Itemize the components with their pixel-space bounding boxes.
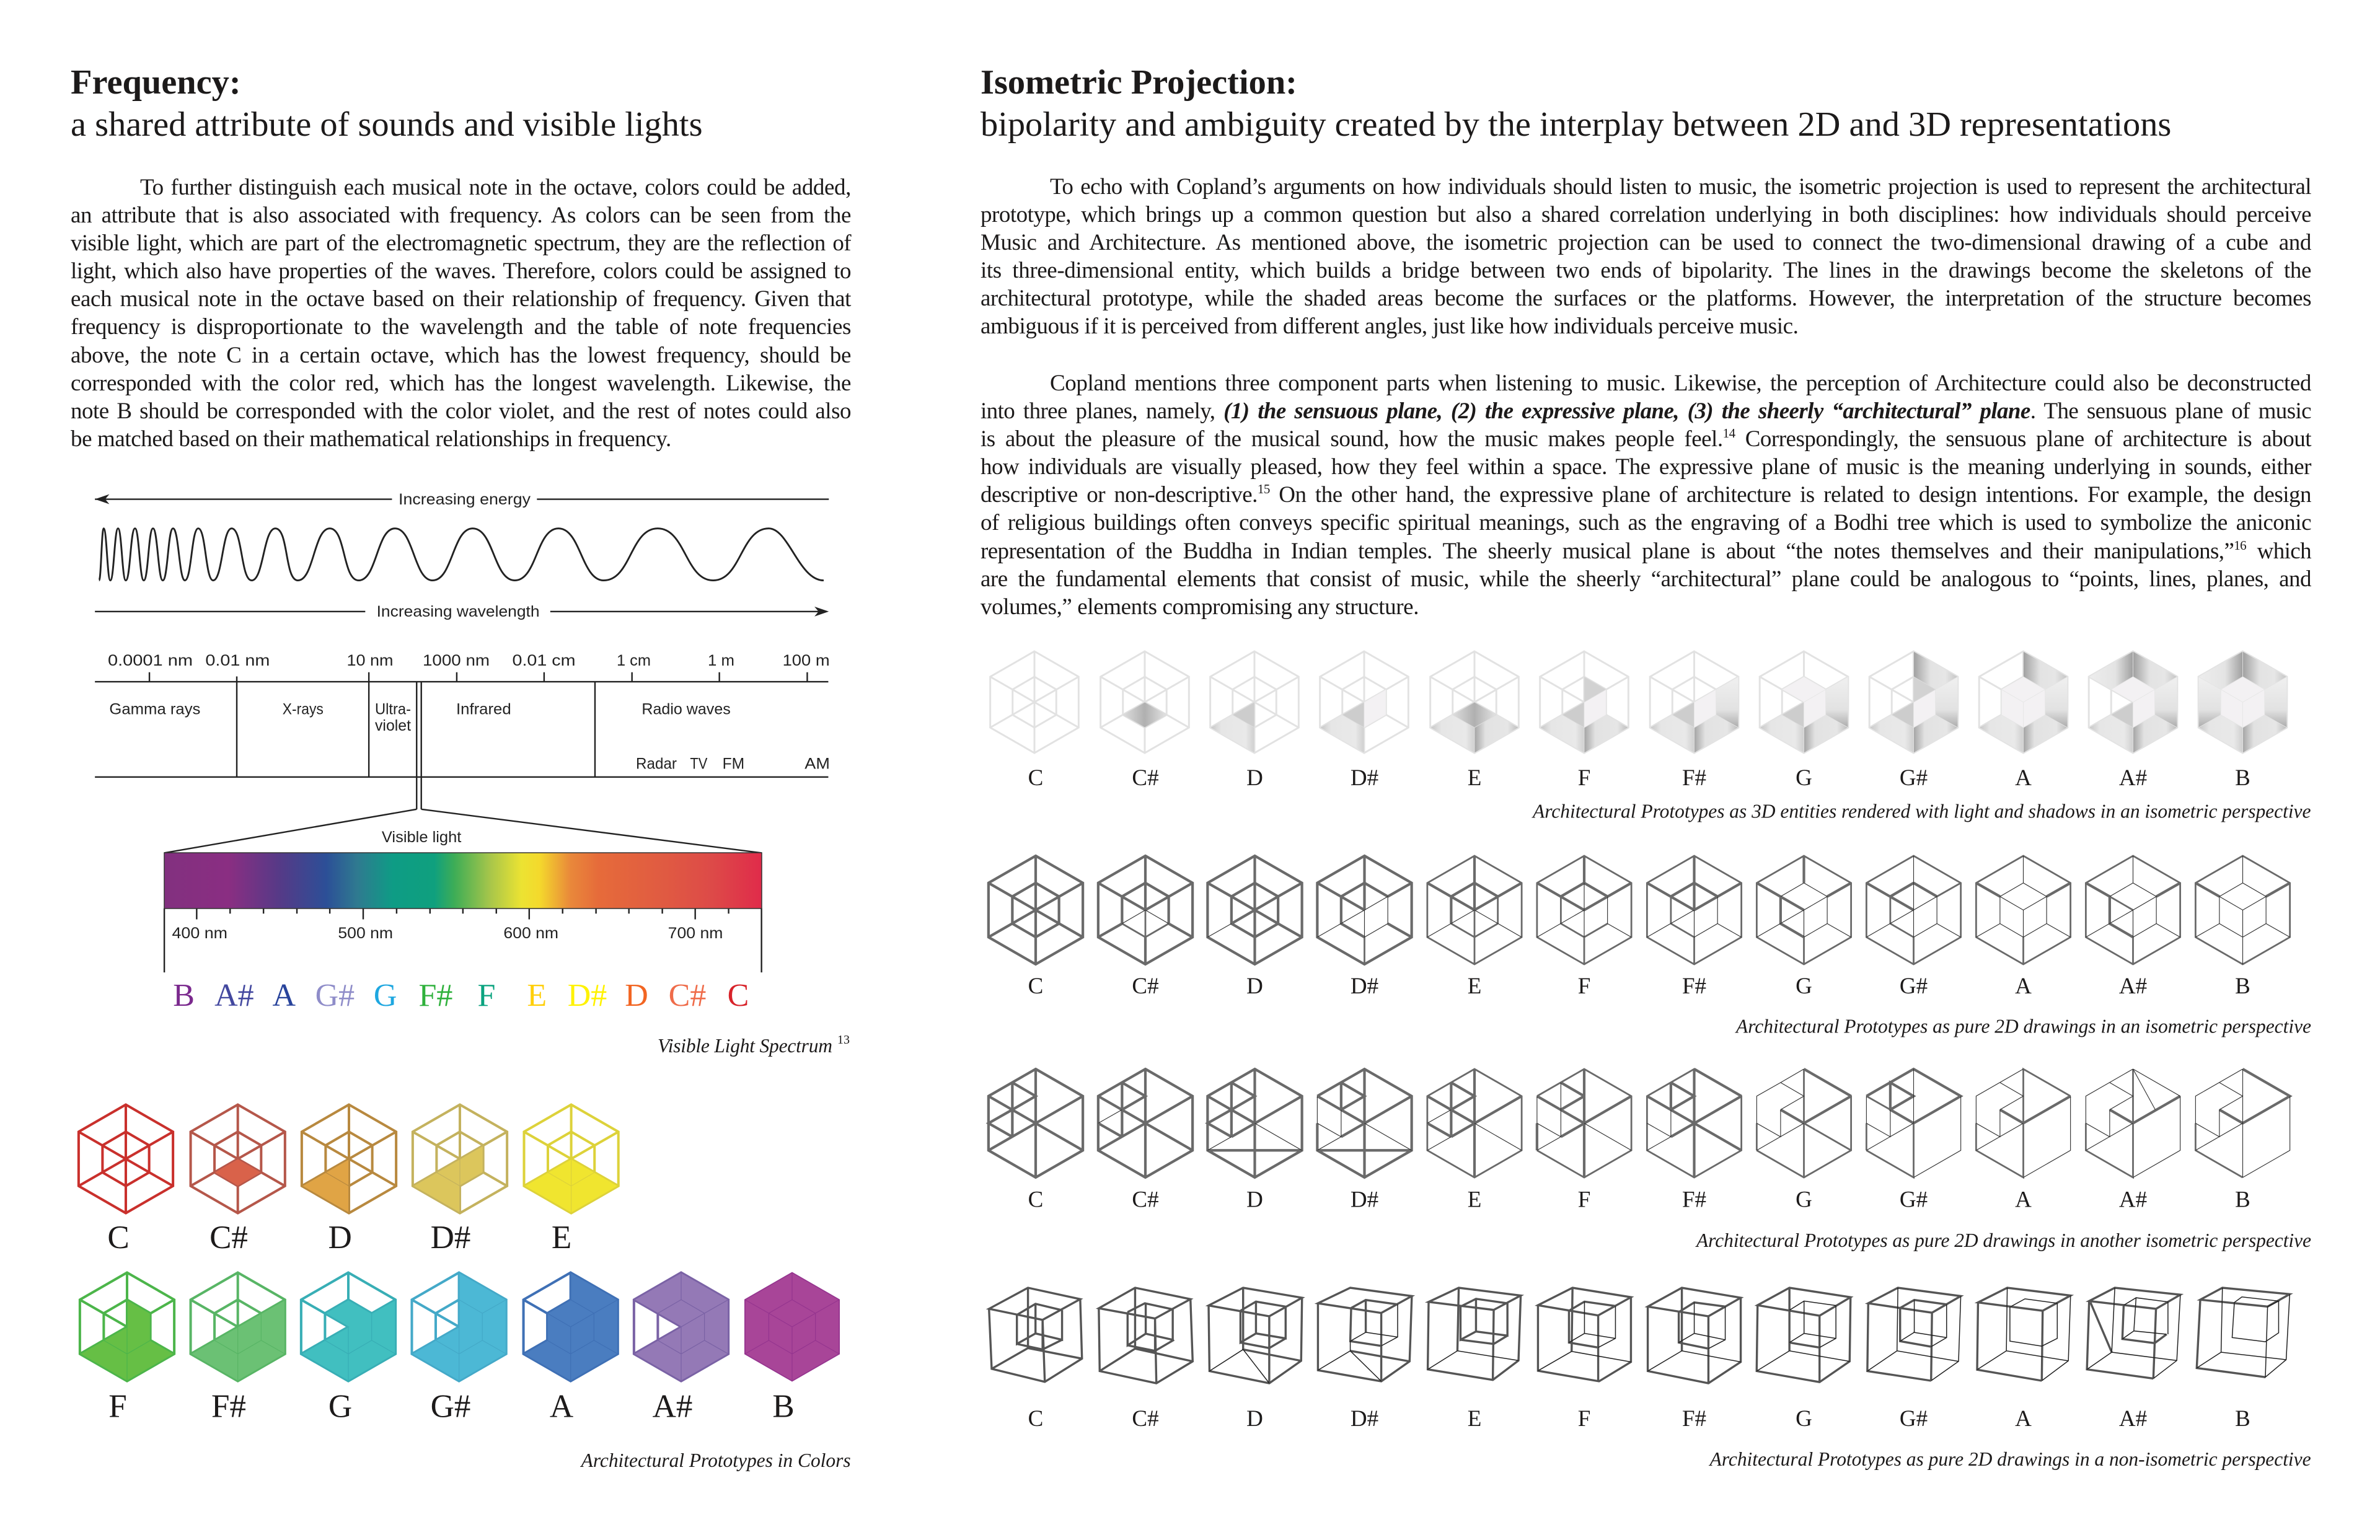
icon: G 3D (1760, 651, 1848, 791)
icon: D 2D (1207, 856, 1302, 999)
icon: G# alt: G# (1900, 1187, 1928, 1213)
text block: isometric paragraph one (981, 174, 2311, 339)
band labels: FM (723, 755, 744, 772)
text block: isometric paragraph two: representation of the Buddha in Indian temples. The sheerly musical plane is about “the notes themselves and their manipulations,”16 which (981, 538, 2311, 564)
icon: G alt (1756, 1069, 1851, 1213)
band labels: TV (690, 755, 708, 772)
icon: E alt (1427, 1069, 1522, 1213)
musical note letters: C (728, 978, 749, 1013)
band labels (109, 701, 830, 772)
scale labels: 1 m (708, 652, 734, 669)
icon: F perspective (1538, 1288, 1631, 1432)
icon: A# (634, 1273, 728, 1424)
icon: A 3D (1979, 651, 2068, 791)
band labels: Infrared (456, 701, 511, 718)
icon: A# 3D: A# (2119, 765, 2147, 791)
text block: isometric paragraph one: Music and Architecture. As mentioned above, the isometric projection can be used to connect the two-dimensional drawing of a cube and (981, 230, 2311, 255)
icon: B perspective (2197, 1288, 2290, 1432)
icon: D# 3D: D# (1351, 765, 1378, 791)
scale labels: 0.01 nm (205, 652, 270, 669)
text block: isometric paragraph one: prototype, which brings up a common question but also a shared correlation underlying in both disciplines: how individuals should perceive (981, 202, 2311, 227)
icon: F perspective: F (1578, 1406, 1590, 1432)
text block: isometric paragraph two: are the fundamental elements that consist of music, while the sheerly “architectural” plane could be analogous to “points, lines, planes, and (981, 566, 2311, 592)
icon: C# perspective: C# (1132, 1406, 1159, 1432)
icon: G (301, 1273, 395, 1424)
icon: A# alt (2086, 1069, 2180, 1213)
icon: G# perspective: G# (1900, 1406, 1928, 1432)
icon: F# perspective (1648, 1288, 1741, 1432)
icon: B 2D (2195, 856, 2290, 999)
icon: F# 2D (1647, 856, 1742, 999)
musical note letters: G# (315, 978, 355, 1013)
icon: C perspective (989, 1288, 1082, 1432)
icon: G# (412, 1273, 506, 1424)
caption: prototypes in colors: Architectural Prototypes in Colors (580, 1450, 851, 1471)
icon: E (524, 1104, 619, 1256)
icon: D# 3D (1320, 651, 1408, 791)
text block: frequency paragraph: frequency is disproportionate to the wavelength and the table of note frequencies (71, 314, 851, 340)
musical note letters (173, 978, 749, 1013)
text block: isometric paragraph one: architectural prototype, while the shaded areas become the surfaces or the platforms. However, the interpretation of the structure becomes (981, 286, 2311, 311)
text block: frequency paragraph (71, 175, 852, 452)
icon: D 3D: D (1246, 765, 1263, 791)
scale labels: 0.0001 nm (108, 652, 193, 669)
text block: frequency paragraph: visible light, which are part of the electromagnetic spectrum, they are the reflection of (71, 231, 851, 256)
band labels: Ultra- (375, 701, 411, 718)
icon: A alt: A (2015, 1187, 2032, 1213)
heading: Isometric Projection: Isometric Projection: (981, 63, 1297, 102)
icon: A# perspective: A# (2119, 1406, 2147, 1432)
icon: B perspective: B (2235, 1406, 2250, 1432)
arrow: increasing energy (95, 495, 829, 504)
musical note letters: F (478, 978, 495, 1013)
icon: B 2D: B (2235, 974, 2250, 999)
icon: A alt (1976, 1069, 2071, 1213)
icon: D alt (1207, 1069, 1302, 1213)
icon: G# alt (1866, 1069, 1961, 1213)
icon: F# 2D: F# (1682, 974, 1706, 999)
icon: A (524, 1273, 618, 1424)
text block: isometric paragraph two: Copland mentions three component parts when listening to music. Likewise, the perception of Architecture could also be deconstructed (1050, 371, 2311, 396)
icon: D# alt: D# (1351, 1187, 1378, 1213)
icon: G perspective: G (1796, 1406, 1812, 1432)
icon: C# 2D: C# (1132, 974, 1159, 999)
nanometre labels: 500 nm (338, 925, 393, 942)
icon: E perspective (1428, 1288, 1521, 1432)
icon: F# perspective: F# (1682, 1406, 1706, 1432)
icon: C# alt (1098, 1069, 1192, 1213)
heading: Frequency (71, 63, 703, 144)
band labels: Radio waves (641, 701, 731, 718)
text block: isometric paragraph two: into three planes, namely, (1) the sensuous plane, (2) the expressive plane, (3) the sheerly “architectural” plane. The sensuous plane of music (981, 398, 2311, 424)
icon: G# perspective (1867, 1288, 1961, 1432)
icon: F# alt: F# (1682, 1187, 1706, 1213)
diagram: electromagnetic spectrum (95, 491, 830, 1013)
icon: A 2D (1976, 856, 2071, 999)
icon: E 3D: E (1468, 765, 1481, 791)
icon: F (80, 1273, 174, 1424)
label: increasing wavelength: Increasing wavelength (377, 603, 540, 620)
icon: F# (191, 1273, 285, 1424)
icon: A: A (550, 1388, 573, 1424)
icon: C red: C (107, 1220, 130, 1256)
heading: Isometric Projection: bipolarity and ambiguity created by the interplay between 2D and 3D representations (981, 105, 2171, 144)
icon: B alt: B (2235, 1187, 2250, 1213)
text block: frequency paragraph: To further distinguish each musical note in the octave, colors could be added, (140, 175, 851, 200)
icon: C# (191, 1104, 285, 1256)
icon: G perspective (1756, 1288, 1851, 1432)
caption: visible light spectrum: Visible Light Spectrum (658, 1035, 832, 1057)
icon: A 2D: A (2015, 974, 2032, 999)
icon: G#: G# (431, 1388, 470, 1424)
icon: C# 3D: C# (1132, 765, 1159, 791)
text block: frequency paragraph: an attribute that is also associated with frequency. As colors can be seen from the (71, 203, 851, 228)
musical note letters: D (625, 978, 648, 1013)
icon: D# alt (1317, 1069, 1412, 1213)
icon: B: B (772, 1388, 795, 1424)
row: another isometric perspective (989, 1069, 2290, 1213)
band labels: AM (804, 755, 830, 772)
icon: A# 2D (2086, 856, 2180, 999)
icon: F alt (1537, 1069, 1631, 1213)
icon: C perspective: C (1028, 1406, 1043, 1432)
icon: D perspective: D (1246, 1406, 1263, 1432)
icon: E 2D: E (1468, 974, 1481, 999)
caption: visible light spectrum: 13 (837, 1033, 850, 1047)
icon: C 3D: C (1028, 765, 1043, 791)
nanometre labels: 700 nm (668, 925, 723, 942)
icon: G: G (328, 1388, 352, 1424)
icon: B 3D (2198, 651, 2287, 791)
text block: frequency paragraph: above, the note C in a certain octave, which has the lowest frequency, should be (71, 343, 851, 368)
musical note letters: G (374, 978, 397, 1013)
icon: A perspective (1977, 1288, 2071, 1432)
icon: F# 3D: F# (1682, 765, 1706, 791)
icon: C 3D (990, 651, 1078, 791)
icon: A# 3D (2089, 651, 2177, 791)
band labels: Gamma rays (109, 701, 200, 718)
nanometre labels: 400 nm (172, 925, 227, 942)
caption: 3D entities: Architectural Prototypes as 3D entities rendered with light and shadows in an isometric perspective (1532, 801, 2311, 822)
band labels: Radar (636, 755, 677, 772)
icon: B alt (2195, 1069, 2290, 1213)
scale labels (108, 652, 830, 669)
musical note letters: C# (669, 978, 706, 1013)
icon: G 3D: G (1796, 765, 1812, 791)
icon: A# alt: A# (2119, 1187, 2147, 1213)
icon: F#: F# (211, 1388, 246, 1424)
caption: another isometric perspective: Architectural Prototypes as pure 2D drawings in another isometric perspective (1695, 1230, 2311, 1251)
icon: F# alt (1647, 1069, 1742, 1213)
text block: isometric paragraph two: how individuals are visually pleased, how they feel within a space. The expressive plane of music is the meaning underlying in sounds, either (981, 454, 2311, 480)
icon: F 3D (1540, 651, 1628, 791)
icon: F alt: F (1578, 1187, 1590, 1213)
icon: F 3D: F (1578, 765, 1590, 791)
text block: isometric paragraph one: its three-dimensional entity, which builds a bridge between two ends of bipolarity. The lines in the drawings become the skeletons of the (981, 258, 2311, 283)
icon: D: D (328, 1220, 352, 1256)
icon: C# alt: C# (1132, 1187, 1159, 1213)
icon: A# perspective (2087, 1288, 2180, 1432)
icon: A# 2D: A# (2119, 974, 2147, 999)
text block: isometric paragraph two: is about the pleasure of the musical sound, how the music makes people feel.14 Correspondingly, the sensuous plane of architecture is about (981, 426, 2311, 452)
scale labels: 1000 nm (423, 652, 490, 669)
heading: Frequency: a shared attribute of sounds and visible lights (71, 105, 703, 144)
icon: C red (79, 1104, 173, 1256)
band labels: violet (375, 717, 411, 734)
musical note letters: F# (418, 978, 452, 1013)
chart: wavelength scale lines (95, 672, 828, 972)
arrow: increasing wavelength (95, 607, 829, 617)
nanometre labels: 600 nm (503, 925, 558, 942)
nanometre labels (172, 925, 723, 942)
icon: D 3D (1210, 651, 1298, 791)
row: 3D rendered prototypes (990, 651, 2287, 791)
icon: F 2D: F (1578, 974, 1590, 999)
icon: F: F (108, 1388, 127, 1424)
scale labels: 100 m (783, 652, 830, 669)
icon: E: E (552, 1220, 571, 1256)
row: non-isometric perspective (989, 1288, 2290, 1432)
scale labels: 1 cm (617, 652, 651, 669)
icon: D alt: D (1246, 1187, 1263, 1213)
text block: isometric paragraph two: volumes,” elements compromising any structure. (981, 594, 1419, 620)
icon: C# 2D (1098, 856, 1192, 999)
icon: C alt: C (1028, 1187, 1043, 1213)
musical note letters: B (173, 978, 195, 1013)
text block: isometric paragraph one: To echo with Copland’s arguments on how individuals should listen to music, the isometric projection is used to represent the architectural (1050, 174, 2311, 200)
text block: isometric paragraph two: of religious buildings often conveys specific spiritual meanings, such as the engraving of a Bodhi tree which is used to symbolize the aniconic (981, 510, 2311, 535)
label: visible light: Visible light (382, 829, 461, 846)
icon: G# 2D (1866, 856, 1961, 999)
text block: isometric paragraph two: descriptive or non-descriptive.15 On the other hand, the expressive plane of architecture is related to design intentions. For example, the design (981, 482, 2311, 508)
icon: C# 3D (1101, 651, 1189, 791)
text block: isometric paragraph one: ambiguous if it is perceived from different angles, just like how individuals perceive music. (981, 314, 1798, 339)
icon: E alt: E (1468, 1187, 1481, 1213)
caption: pure 2D isometric: Architectural Prototypes as pure 2D drawings in an isometric perspective (1735, 1015, 2311, 1037)
text block: isometric paragraph two (981, 371, 2312, 620)
icon: C alt (989, 1069, 1083, 1213)
icon: D# (413, 1104, 507, 1256)
icon: E 3D (1430, 651, 1518, 791)
chart: wave (99, 529, 824, 581)
icon: D perspective (1209, 1288, 1302, 1432)
icon: B (745, 1273, 839, 1424)
label: increasing energy: Increasing energy (399, 491, 531, 508)
icon: B 3D: B (2235, 765, 2250, 791)
row: pure 2D isometric prototypes (989, 856, 2290, 999)
musical note letters: A (273, 978, 296, 1013)
icon: D# 2D (1317, 856, 1412, 999)
text block: frequency paragraph: corresponded with the color red, which has the longest wavelength. Likewise, the (71, 371, 851, 396)
icon: D# 2D: D# (1351, 974, 1378, 999)
icon: G# 2D: G# (1900, 974, 1928, 999)
heading: Frequency: Frequency: (71, 63, 241, 102)
scale labels: 10 nm (347, 652, 393, 669)
scale labels: 0.01 cm (512, 652, 575, 669)
icon: E perspective: E (1468, 1406, 1481, 1432)
icon: D#: D# (431, 1220, 470, 1256)
icon: A 3D: A (2015, 765, 2032, 791)
musical note letters: D# (568, 978, 607, 1013)
icon: A perspective: A (2015, 1406, 2032, 1432)
icon: D (302, 1104, 396, 1256)
icon: C#: C# (209, 1220, 248, 1256)
icon: A#: A# (653, 1388, 692, 1424)
icon: C# perspective (1099, 1288, 1192, 1432)
icon: C 2D (989, 856, 1083, 999)
musical note letters: E (527, 978, 547, 1013)
text block: frequency paragraph: note B should be corresponded with the color violet, and the rest of notes could also (71, 398, 851, 424)
icon: G# 3D (1869, 651, 1958, 791)
panel: colored prototypes (79, 1104, 839, 1424)
icon: D 2D: D (1246, 974, 1263, 999)
text block: frequency paragraph: be matched based on their mathematical relationships in frequency. (71, 426, 671, 452)
icon: G# 3D: G# (1900, 765, 1928, 791)
text block: frequency paragraph: light, which also have properties of the waves. Therefore, colors could be assigned to (71, 258, 851, 284)
icon: C 2D: C (1028, 974, 1043, 999)
icon: F 2D (1537, 856, 1631, 999)
icon: F# 3D (1650, 651, 1739, 791)
caption: non-isometric perspective: Architectural Prototypes as pure 2D drawings in a non-isometric perspective (1709, 1448, 2311, 1470)
musical note letters: A# (214, 978, 254, 1013)
icon: G 2D (1756, 856, 1851, 999)
text block: frequency paragraph: each musical note in the octave based on their relationship of frequency. Given that (71, 286, 851, 312)
visible light gradient bar (164, 853, 762, 909)
icon: D# perspective: D# (1351, 1406, 1378, 1432)
icon: D# perspective (1318, 1288, 1412, 1432)
icon: G 2D: G (1796, 974, 1812, 999)
heading: Isometric Projection (981, 63, 2171, 144)
icon: E 2D (1427, 856, 1522, 999)
band labels: X-rays (283, 701, 324, 718)
icon: G alt: G (1796, 1187, 1812, 1213)
